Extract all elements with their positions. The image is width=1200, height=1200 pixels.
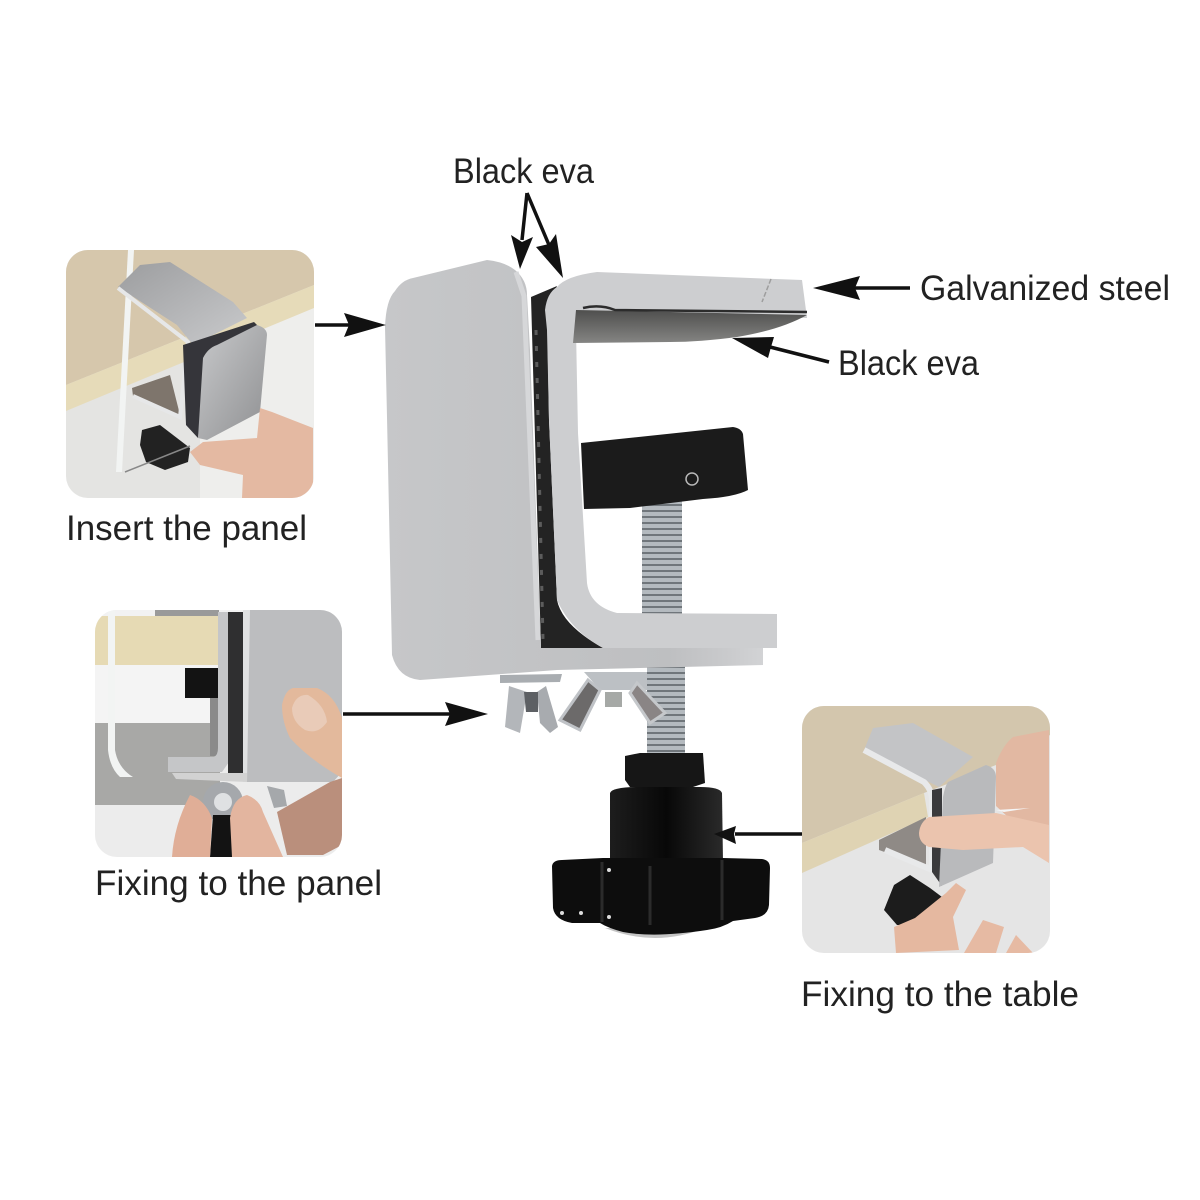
black round pressure pad <box>581 427 748 509</box>
arrow: fixing table to knob <box>714 826 802 844</box>
label: Black eva top: Black eva <box>453 152 594 191</box>
arrow: insert panel to clamp <box>315 313 386 337</box>
arrows: Black eva top pointers <box>511 193 563 278</box>
photo card: fixing to the panel <box>95 609 342 857</box>
front silver plate and base <box>385 260 763 680</box>
wing nuts <box>500 672 665 733</box>
galvanized steel C bracket <box>545 272 807 648</box>
photo card: insert the panel <box>66 250 314 498</box>
photo: main clamp <box>385 260 807 938</box>
threaded bolt <box>642 500 685 756</box>
label: Black eva right: Black eva <box>838 344 979 383</box>
caption: Fixing to the table: Fixing to the table <box>801 975 1079 1014</box>
caption: Insert the panel: Insert the panel <box>66 509 307 548</box>
black star knob <box>552 753 770 938</box>
photo card: fixing to the table <box>802 706 1050 953</box>
caption: Fixing to the panel: Fixing to the panel <box>95 864 382 903</box>
black eva underside <box>573 279 807 343</box>
label: Galvanized steel: Galvanized steel <box>920 269 1170 308</box>
arrow: fixing panel to wing nuts <box>343 702 488 726</box>
black eva layer <box>531 286 603 648</box>
arrow: Black eva right pointer <box>732 337 829 362</box>
arrow: Galvanized steel pointer <box>813 276 910 300</box>
